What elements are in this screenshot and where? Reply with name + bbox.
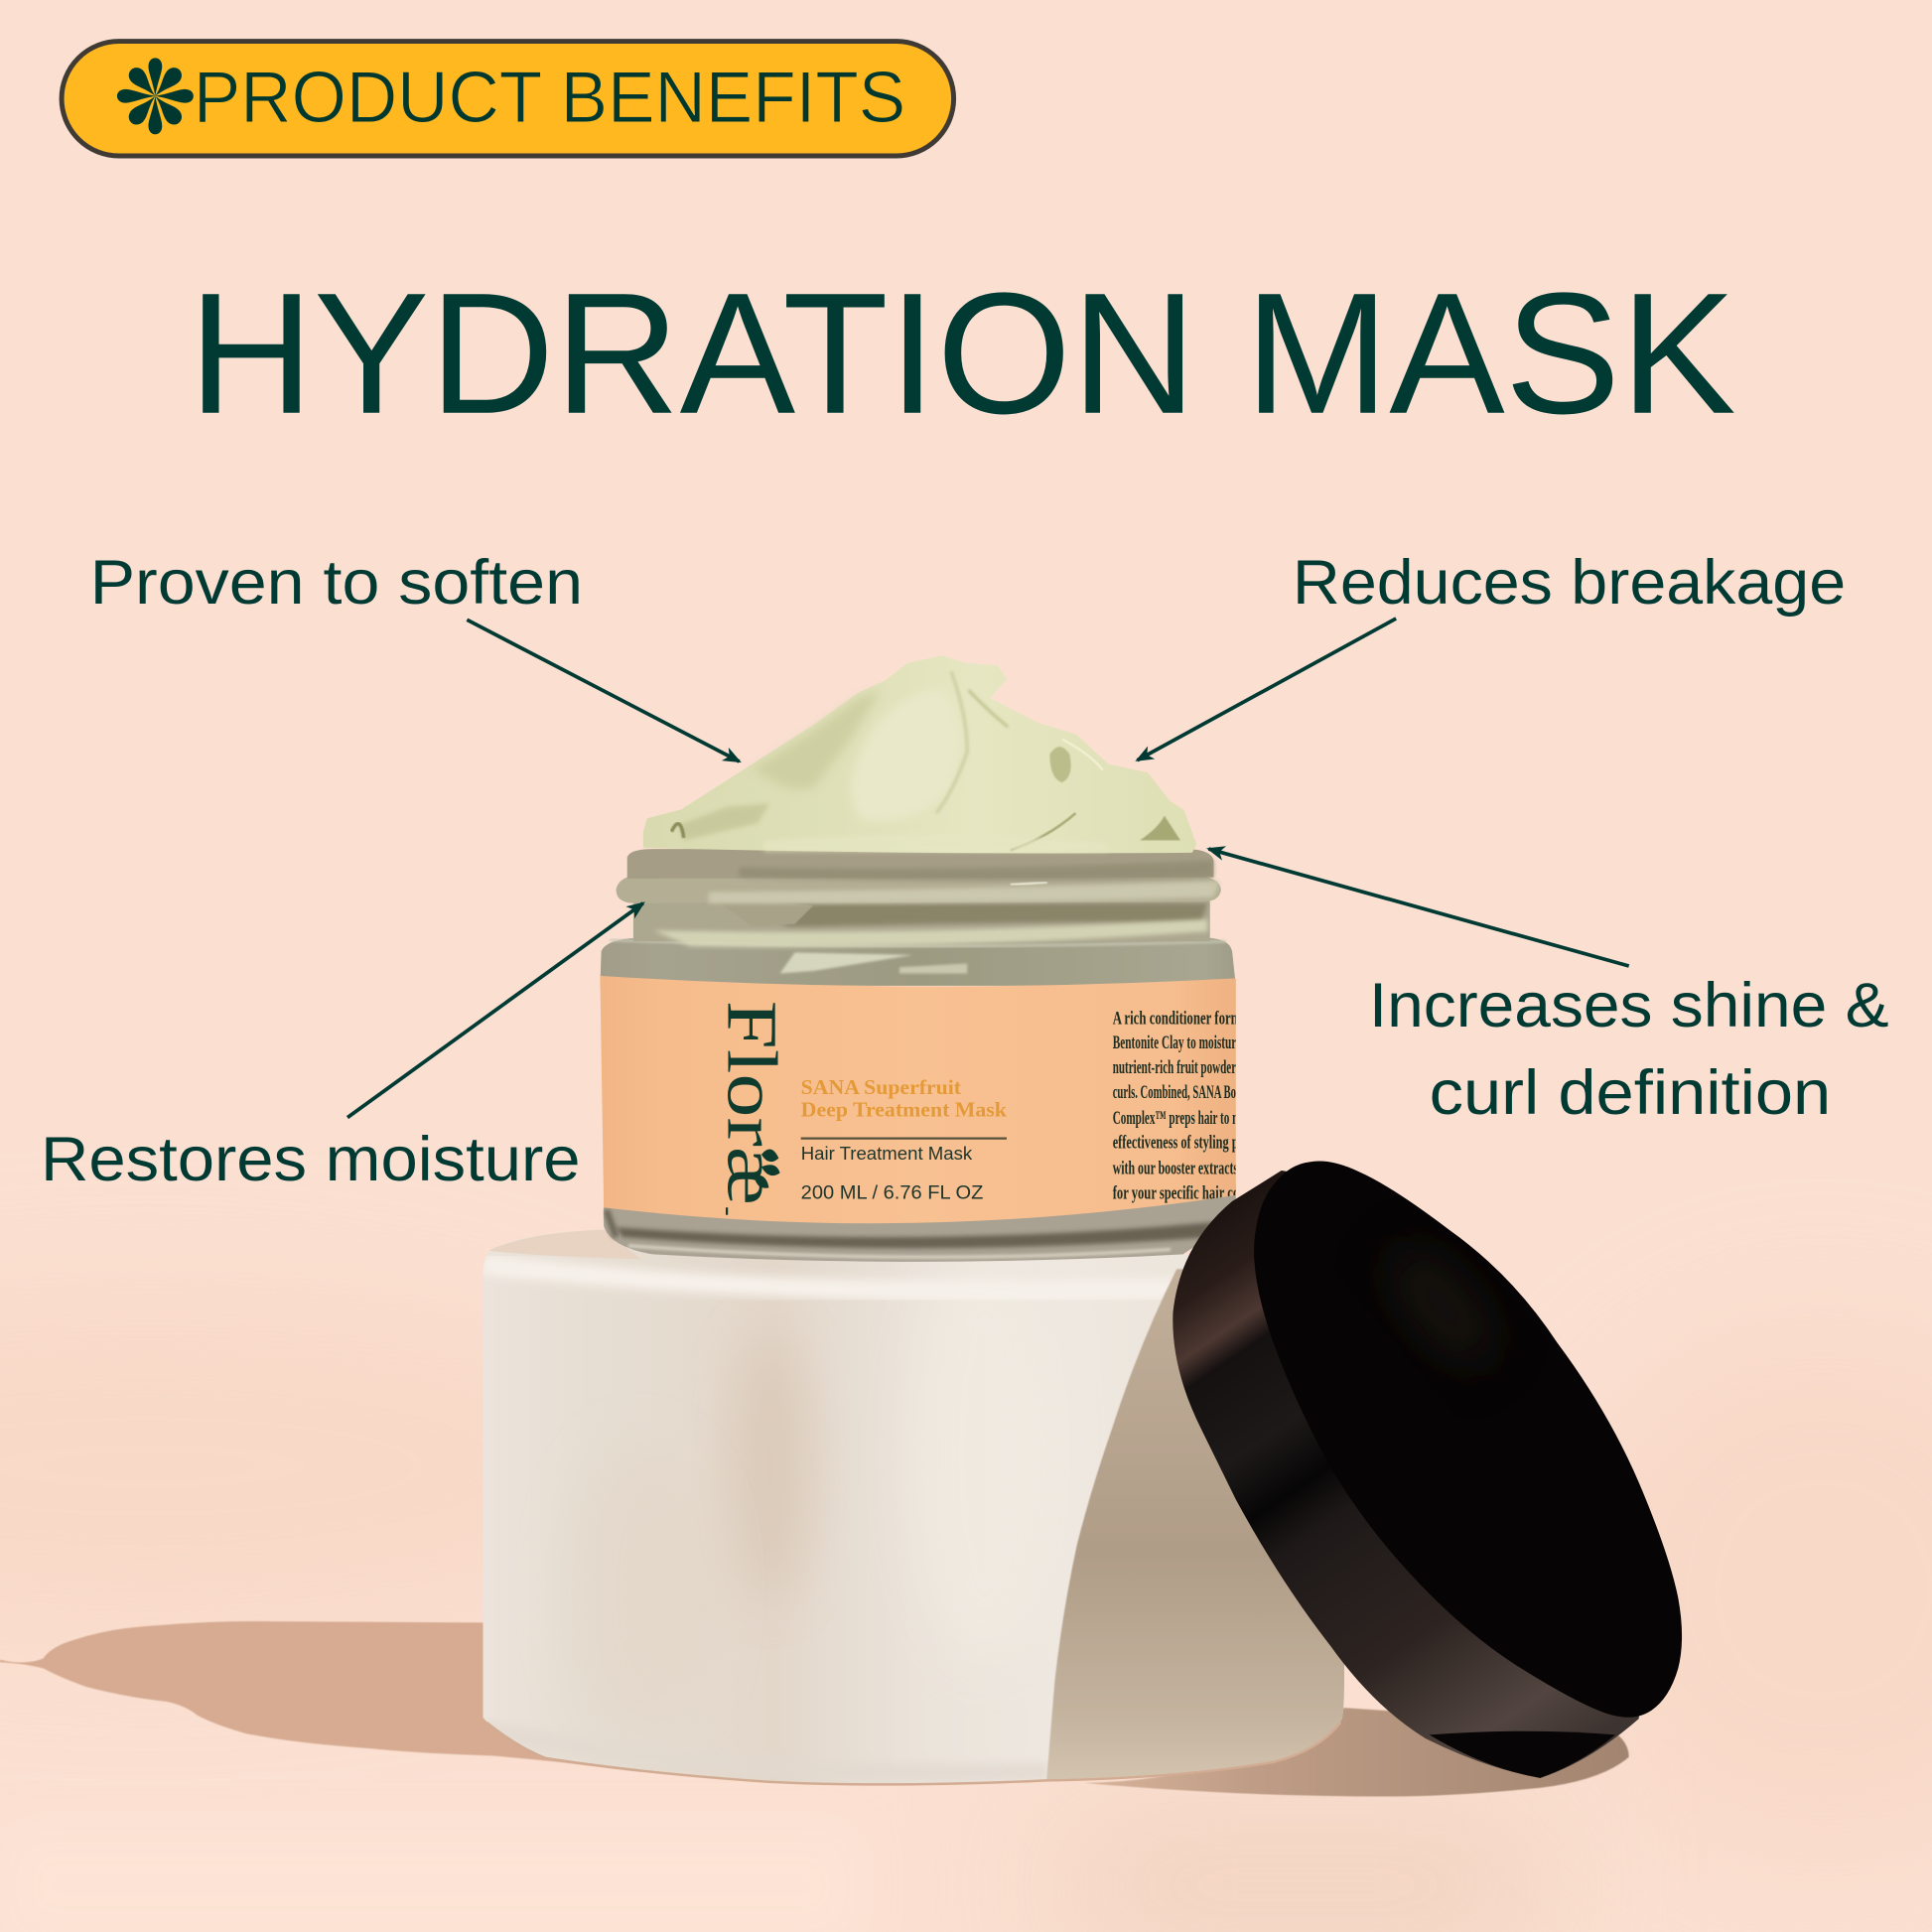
icon: flower: [117, 58, 194, 134]
arrow: reduces breakage: [1138, 619, 1396, 760]
right description text: Bentonite Clay to moisturize and: [1113, 1033, 1271, 1053]
title: HYDRATION MASK: [189, 257, 1736, 450]
right description text: with our booster extracts to treat: [1113, 1159, 1278, 1179]
badge: [62, 42, 954, 156]
black lid: [1173, 1162, 1682, 1778]
jar: [600, 656, 1292, 1262]
arrow: proven to soften: [467, 620, 740, 761]
right description text: nutrient-rich fruit powders to nourish: [1113, 1057, 1292, 1078]
jar base glass: [604, 1182, 1236, 1262]
right description text: [1112, 1011, 1236, 1203]
jar neck: [633, 899, 1210, 941]
product name: [801, 1075, 1007, 1121]
callout: restores moisture: Restores moisture: [41, 1125, 581, 1194]
right description text: for your specific hair concerns.: [1113, 1183, 1278, 1204]
product name: SANA Superfruit: [801, 1075, 961, 1099]
marble pillar: [483, 1230, 1349, 1787]
icon: leaves: [726, 1149, 780, 1215]
callout: increases shine and curl definition: [1369, 971, 1889, 1128]
right description text: curls. Combined, SANA Boost Hair: [1113, 1082, 1273, 1103]
shadow on pillar: [1046, 1269, 1349, 1787]
jar upper body glass: [600, 937, 1236, 986]
arrow: increases shine: [1208, 849, 1629, 966]
product name: Deep Treatment Mask: [801, 1097, 1007, 1121]
brand wordmark: Floræ: [712, 1001, 791, 1205]
cream: [644, 656, 1195, 852]
volume: 200 ML / 6.76 FL OZ: [801, 1182, 983, 1204]
lid bottom crescent: [1430, 1731, 1615, 1778]
badge text: PRODUCT BENEFITS: [194, 57, 905, 138]
jar flange: [617, 876, 1221, 903]
callout: reduces breakage: Reduces breakage: [1293, 548, 1846, 618]
callout: increases shine and curl definition: curl definition: [1430, 1058, 1831, 1128]
product type: Hair Treatment Mask: [801, 1143, 973, 1164]
lid face: [1254, 1162, 1682, 1718]
arrow: restores moisture: [347, 903, 643, 1118]
jar label: [600, 976, 1292, 1223]
callout: proven to soften: Proven to soften: [90, 548, 583, 618]
jar lip: [627, 849, 1213, 879]
callout: increases shine and curl definition: Increases shine &: [1369, 971, 1889, 1040]
right description text: Complex™ preps hair to maximize: [1113, 1108, 1278, 1129]
right description text: A rich conditioner formulated: [1113, 1008, 1276, 1029]
right description text: effectiveness of styling products: [1113, 1133, 1278, 1154]
pillar cast shadow on floor: [0, 1621, 640, 1772]
lid rim: [1173, 1171, 1651, 1778]
lid cast shadow on floor: [1084, 1708, 1629, 1796]
